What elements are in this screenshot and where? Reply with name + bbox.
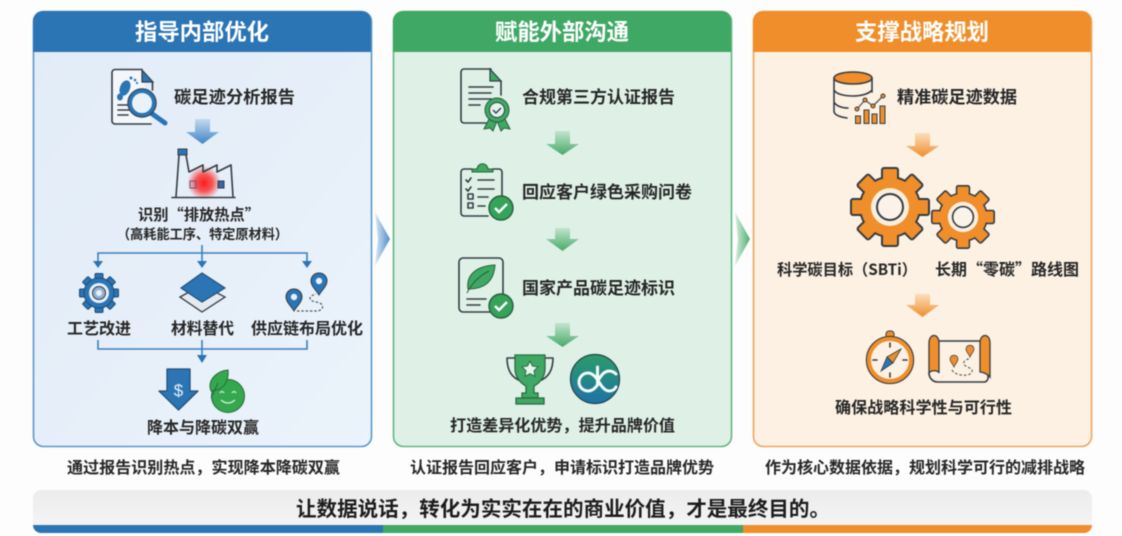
arrows: merge [98, 340, 307, 363]
panel: 指导内部优化 [33, 11, 372, 446]
icon: database with chart [834, 72, 885, 124]
conclusion banner: 让数据说话，转化为实实在在的商业价值，才是最终目的。 [296, 497, 830, 521]
text: 识别“排放热点”: 识别“排放热点” [138, 203, 260, 225]
icon: footprint report with magnifier [112, 70, 165, 124]
arrow [906, 294, 939, 317]
text: 碳足迹分析报告: 碳足迹分析报告 [174, 87, 295, 107]
text: 高耗能工序、特定原材料: （高耗能工序、特定原材料） [117, 223, 288, 243]
text: 供应链布局优化: 供应链布局优化 [251, 319, 363, 338]
icon: cost down arrow: $ [174, 381, 184, 400]
text: 降本与降碳双赢: 降本与降碳双赢 [147, 418, 259, 437]
arrow [546, 131, 579, 155]
icon: material layers [180, 273, 225, 312]
arrow [906, 133, 939, 157]
panel header: 支撑战略规划: 支撑战略规划 [855, 20, 989, 45]
caption: panel 1: 通过报告识别热点，实现降本降碳双赢 [67, 458, 340, 477]
text: 确保战略科学性与可行性: 确保战略科学性与可行性 [835, 398, 1012, 417]
panel: 支撑战略规划 [753, 11, 1092, 446]
text: 合规第三方认证报告: 合规第三方认证报告 [522, 87, 675, 107]
icon: product carbon label [459, 258, 513, 318]
arrow [546, 228, 579, 251]
panel header: 支撑战略规划 [753, 11, 1091, 52]
chevron: panel 1 to panel 2 [375, 212, 390, 266]
icon: compass [866, 331, 914, 384]
icon: certified report [461, 69, 510, 131]
panel header: 赋能外部沟通: 赋能外部沟通 [495, 20, 629, 45]
icon: factory hotspot [172, 149, 235, 200]
text: 材料替代: 材料替代 [171, 319, 234, 338]
icon: trophy [507, 355, 553, 404]
icon: supply chain pins [286, 273, 327, 311]
panel header: 赋能外部沟通 [393, 11, 731, 52]
icon: process gear [80, 274, 118, 312]
caption: panel 3: 作为核心数据依据，规划科学可行的减排战略 [765, 458, 1085, 477]
text: 打造差异化优势，提升品牌价值: 打造差异化优势，提升品牌价值 [450, 416, 675, 435]
text: 回应客户绿色采购问卷: 回应客户绿色采购问卷 [522, 182, 692, 202]
text: 科学碳目标（SBTi）: 科学碳目标（SBTi） [777, 258, 917, 280]
conclusion banner [33, 490, 1092, 533]
arrows: split [93, 245, 312, 268]
panel header: 指导内部优化 [33, 11, 371, 52]
icon: checklist clipboard [461, 164, 513, 220]
icon: large gear [851, 168, 929, 246]
text: 工艺改进: 工艺改进 [67, 320, 131, 338]
icon: roadmap scroll [929, 336, 990, 382]
icon: dc brand logo [570, 354, 620, 404]
icon: cost down arrow [159, 369, 198, 410]
icon: small gear [932, 186, 994, 248]
text: 国家产品碳足迹标识: 国家产品碳足迹标识 [522, 278, 675, 298]
panel header: 指导内部优化: 指导内部优化 [135, 20, 269, 45]
arrow [546, 323, 579, 347]
text: 精准碳足迹数据: 精准碳足迹数据 [897, 87, 1017, 107]
arrow [186, 119, 219, 144]
panel: 赋能外部沟通 [393, 11, 732, 446]
text: 长期“零碳”路线图: 长期“零碳”路线图 [935, 256, 1079, 280]
chevron: panel 2 to panel 3 [735, 212, 750, 266]
caption: panel 2: 认证报告回应客户，申请标识打造品牌优势 [410, 458, 714, 477]
icon: leaf smiley [210, 370, 244, 412]
